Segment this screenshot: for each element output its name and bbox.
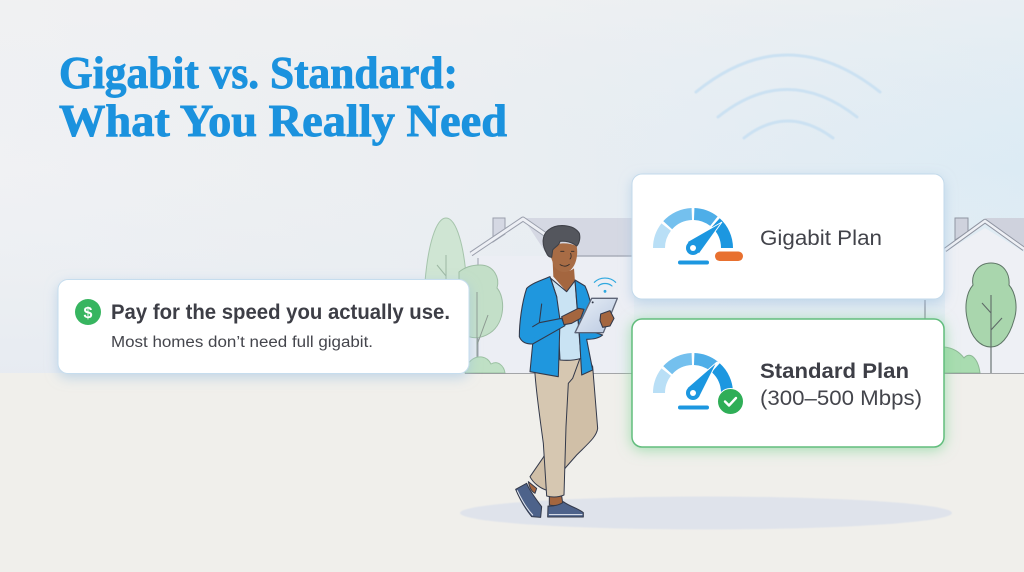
tablet camera bbox=[592, 301, 594, 303]
ankles bbox=[528, 482, 563, 505]
card label: Gigabit Plan bbox=[760, 227, 882, 250]
title: Gigabit vs. Standard: bbox=[59, 47, 458, 98]
card: standard plan bbox=[632, 319, 944, 447]
wifi arcs decoration bbox=[696, 55, 880, 138]
front foot shoe bbox=[548, 502, 583, 517]
icon: dollar bbox=[75, 299, 101, 325]
hair bbox=[543, 226, 580, 257]
sleeve detail bbox=[533, 304, 565, 344]
card label bbox=[760, 360, 922, 410]
left bush bbox=[465, 357, 505, 373]
back foot shoe bbox=[516, 483, 542, 517]
facial features bbox=[560, 251, 574, 266]
background sky bbox=[0, 0, 1024, 374]
title bbox=[59, 47, 507, 146]
callout heading: Pay for the speed you actually use. bbox=[111, 301, 450, 324]
hand on tablet bbox=[562, 308, 584, 325]
ground line bbox=[465, 372, 1024, 374]
right tree bbox=[966, 263, 1016, 373]
ground shadow ellipse bbox=[460, 496, 952, 530]
icon: dollar: $ bbox=[84, 305, 93, 322]
gauge: gigabit bbox=[659, 214, 743, 262]
neck bbox=[553, 262, 575, 292]
right bush bbox=[944, 347, 980, 373]
cardigan right bbox=[575, 280, 603, 375]
holding hand bbox=[600, 311, 614, 327]
left house bbox=[471, 218, 640, 373]
lower body bbox=[516, 358, 598, 517]
card label: (300–500 Mbps) bbox=[760, 387, 922, 410]
left round tree bbox=[459, 265, 503, 373]
shirt bbox=[551, 278, 581, 360]
figure: person with tablet bbox=[516, 226, 617, 517]
background ground bbox=[0, 373, 1024, 572]
gauge: standard bbox=[659, 359, 727, 408]
front leg bbox=[535, 358, 580, 497]
title: What You Really Need bbox=[59, 95, 507, 146]
tablet bbox=[575, 298, 617, 333]
upper body bbox=[519, 226, 617, 377]
card: gigabit plan bbox=[632, 174, 944, 299]
icon: check badge bbox=[718, 388, 744, 414]
right house bbox=[925, 218, 1024, 373]
tablet wifi bbox=[594, 278, 616, 292]
callout body: Most homes don’t need full gigabit. bbox=[111, 334, 373, 351]
cardigan left bbox=[519, 277, 560, 377]
shoe soles bbox=[517, 491, 582, 515]
back leg bbox=[530, 358, 598, 490]
callout: pay for speed bbox=[58, 280, 469, 374]
left tall tree bbox=[425, 218, 467, 290]
face bbox=[551, 243, 577, 272]
card label: Standard Plan bbox=[760, 360, 909, 383]
